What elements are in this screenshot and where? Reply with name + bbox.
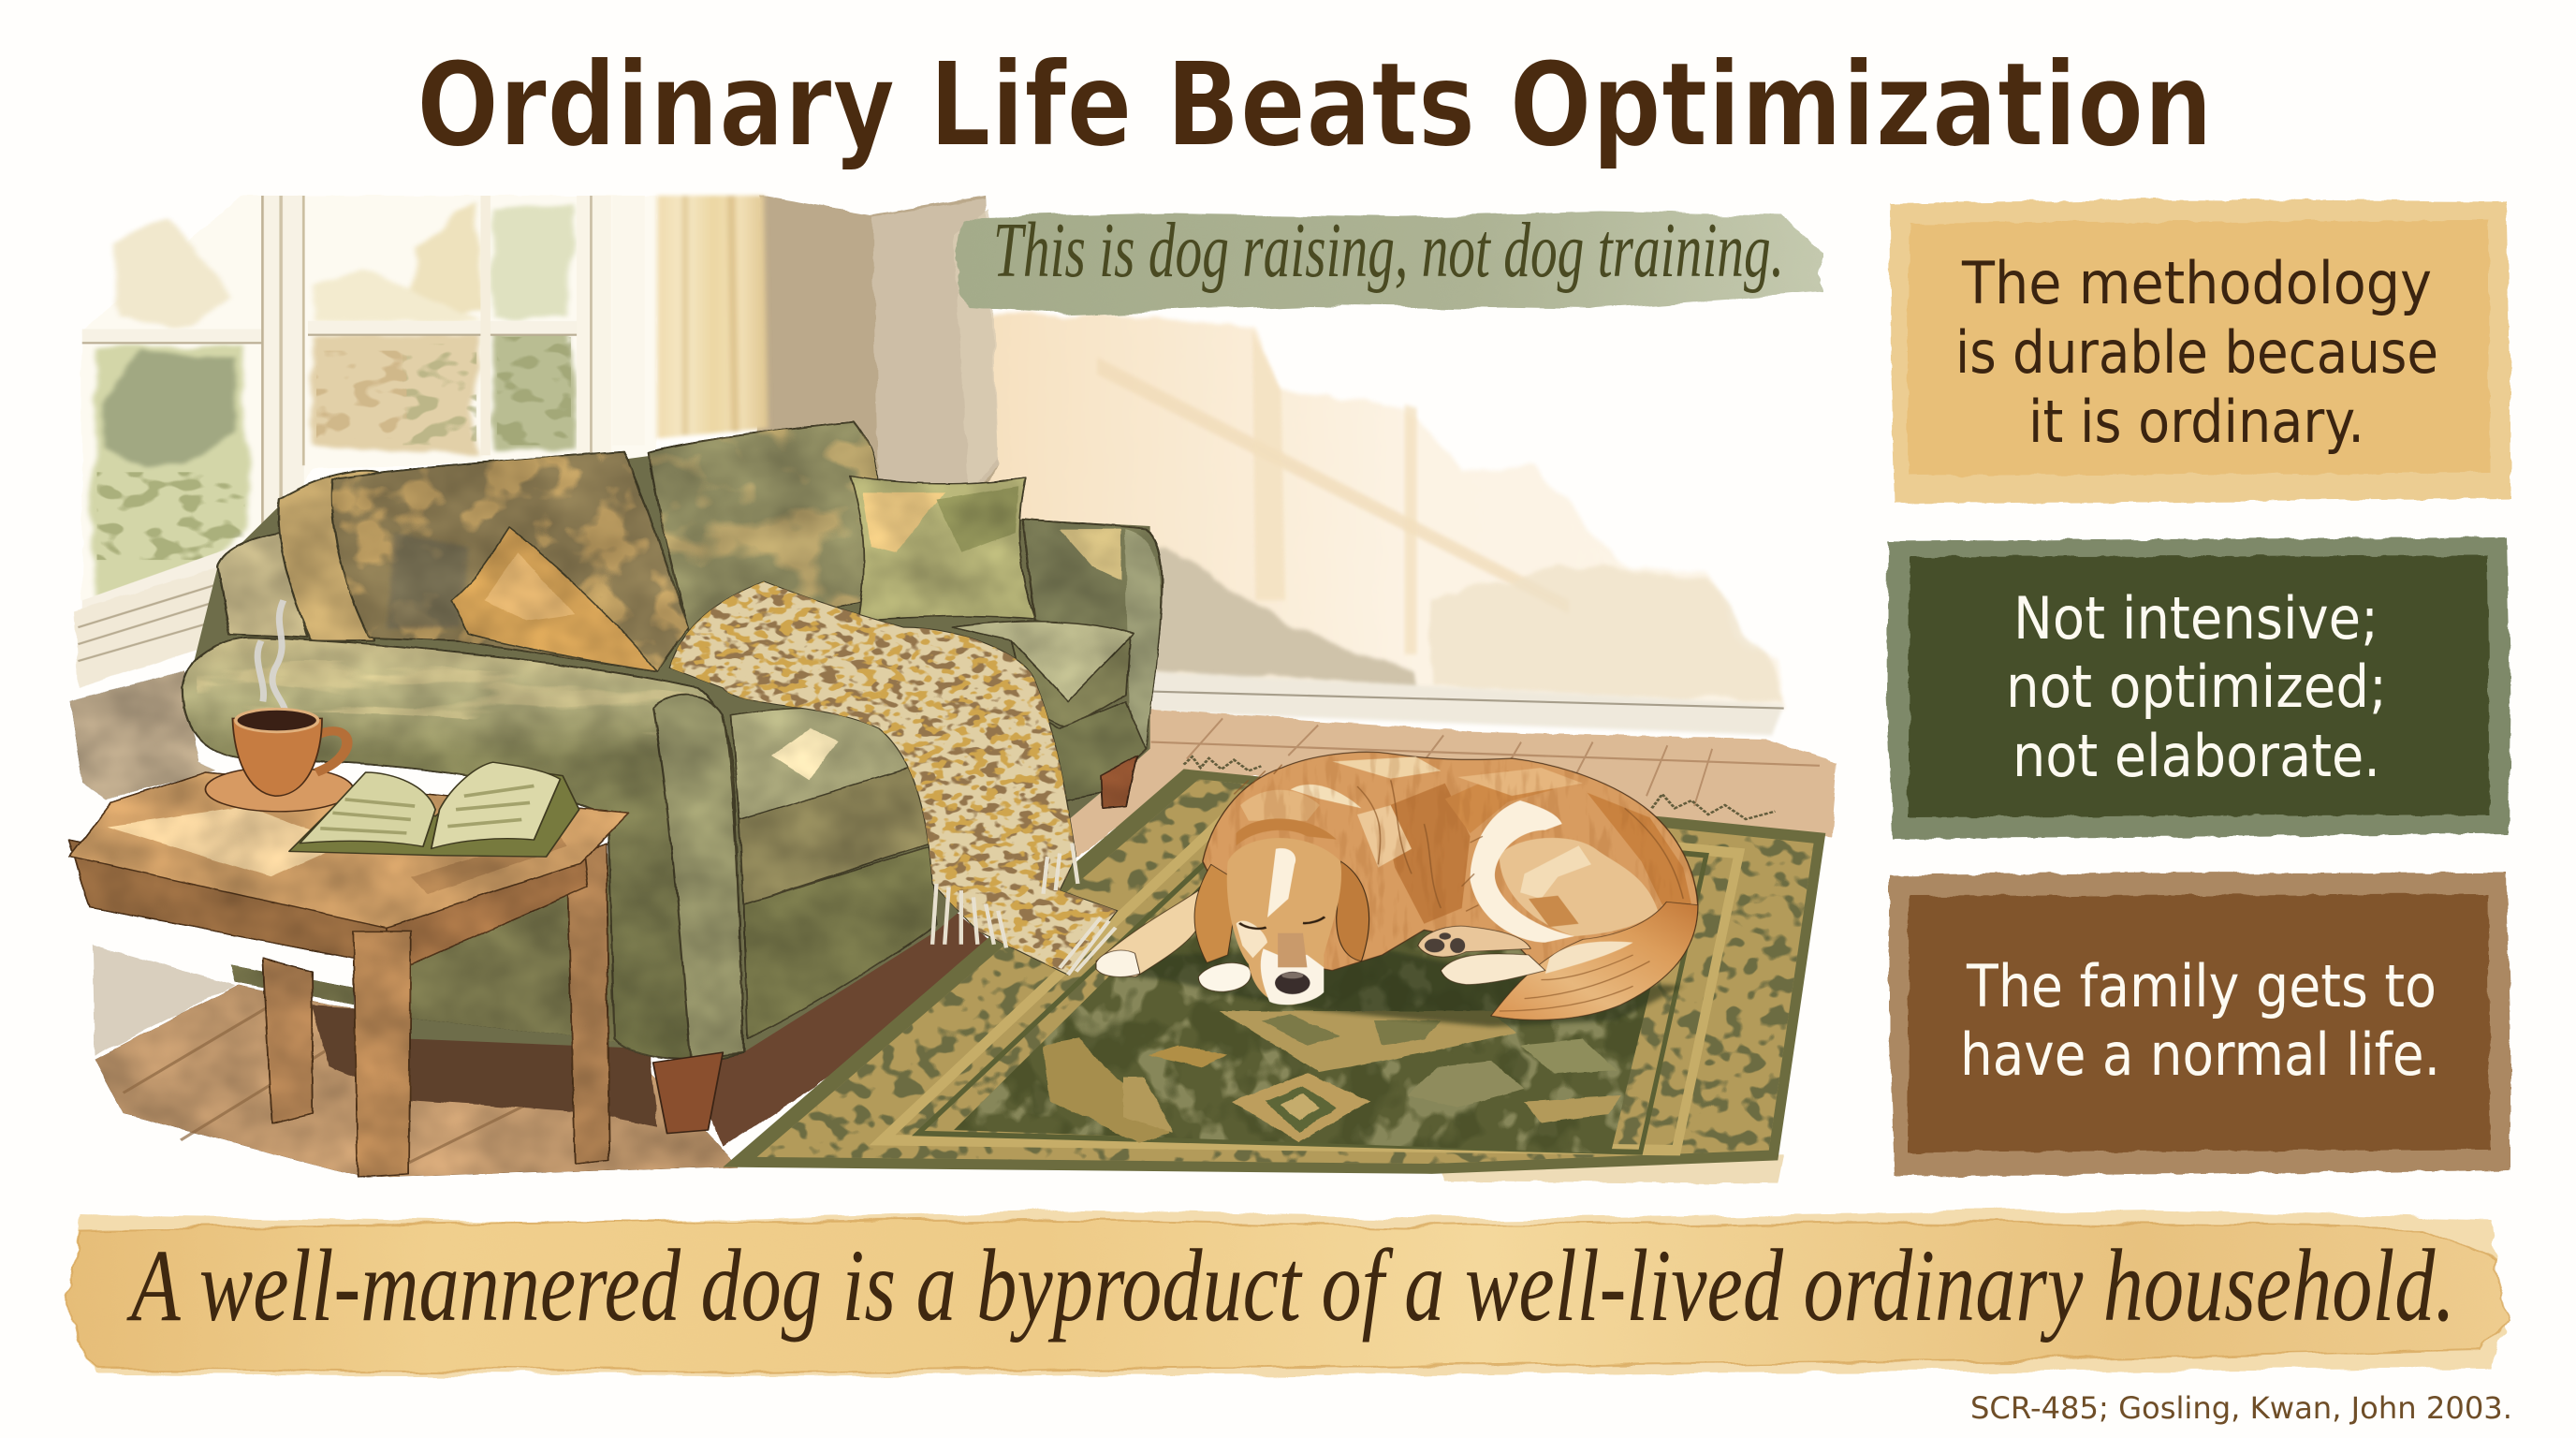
cup handle [316, 731, 347, 772]
callout brush: dog raising [955, 207, 1821, 315]
patterned green rug [723, 769, 1825, 1184]
sofa leg back [1101, 756, 1137, 808]
steam [257, 600, 286, 728]
back cushions [279, 421, 877, 671]
nose [1275, 972, 1310, 994]
card: durable because ordinary: it is ordinary. [2028, 388, 2364, 456]
title: Ordinary Life Beats Optimization [417, 37, 2213, 173]
card: normal family life: The family gets to [1966, 952, 2437, 1020]
dog legs and paws [1096, 887, 1545, 991]
card: normal family life [1889, 873, 2510, 1176]
card: durable because ordinary: The methodology [1961, 249, 2432, 317]
window frames [82, 196, 645, 627]
sleeping golden retriever [1096, 752, 1698, 1027]
table front aprons [70, 840, 587, 964]
green sofa [183, 421, 1162, 1134]
citation: SCR-485; Gosling, Kwan, John 2003. [1970, 1390, 2512, 1426]
takeaway band [67, 1210, 2509, 1376]
card: not intensive: not optimized; [2006, 653, 2387, 721]
face [1227, 838, 1341, 1005]
tail [1491, 902, 1698, 1020]
table top [70, 772, 628, 928]
sofa skirt under table [230, 877, 616, 1042]
cup body [232, 718, 322, 796]
sofa front leg [653, 1052, 723, 1134]
gold pillow [452, 527, 657, 671]
brown wall panels beside curtain [755, 196, 998, 520]
floorboards by the rug [1008, 709, 1837, 857]
card: durable because ordinary [1890, 199, 2510, 504]
wooden floor and lower wall [70, 671, 1010, 1177]
room wall with window light [864, 314, 1787, 776]
saucer [205, 767, 353, 812]
sofa seat cushions [731, 708, 936, 1039]
fur strokes [1234, 765, 1683, 1011]
foliage spots [97, 337, 571, 560]
illustration: cosy living room with sleeping dog [70, 196, 1837, 1184]
right ear [1337, 861, 1369, 961]
card: not intensive [1887, 537, 2510, 839]
patterned throw blanket [669, 581, 1118, 975]
dog shadow [1106, 948, 1683, 1027]
closed eyes [1239, 917, 1325, 929]
blanket fringe [932, 844, 1116, 975]
rug fringe [1184, 756, 1775, 819]
rug left field ornament [1044, 1039, 1169, 1143]
curtains [657, 196, 768, 438]
coffee [236, 709, 318, 732]
open book [289, 762, 579, 857]
callout brush: dog raising: This is dog raising, not dog training. [993, 207, 1784, 294]
coffee cup with steam [205, 600, 353, 812]
table front leg [353, 931, 411, 1177]
haunch [1500, 838, 1658, 936]
table back legs [263, 844, 609, 1164]
card: normal family life: have a normal life. [1960, 1020, 2440, 1089]
card: not intensive: Not intensive; [2013, 584, 2378, 653]
card: durable because ordinary: is durable because [1955, 318, 2438, 387]
dog body [1203, 752, 1698, 1020]
sofa backing [183, 428, 1150, 1052]
window with garden view [74, 196, 657, 688]
sofa back stub [218, 533, 308, 638]
sofa left arm [183, 638, 743, 1061]
green pillow [850, 476, 1035, 621]
rug medallion and ornaments [1123, 1011, 1620, 1142]
sofa right arm and base [953, 520, 1162, 802]
dog head [1194, 818, 1369, 1005]
garden foliage [91, 202, 574, 597]
left ear [1194, 864, 1237, 962]
window sill [74, 566, 222, 688]
wooden side table [70, 772, 628, 1177]
card: not intensive: not elaborate. [2012, 722, 2380, 790]
